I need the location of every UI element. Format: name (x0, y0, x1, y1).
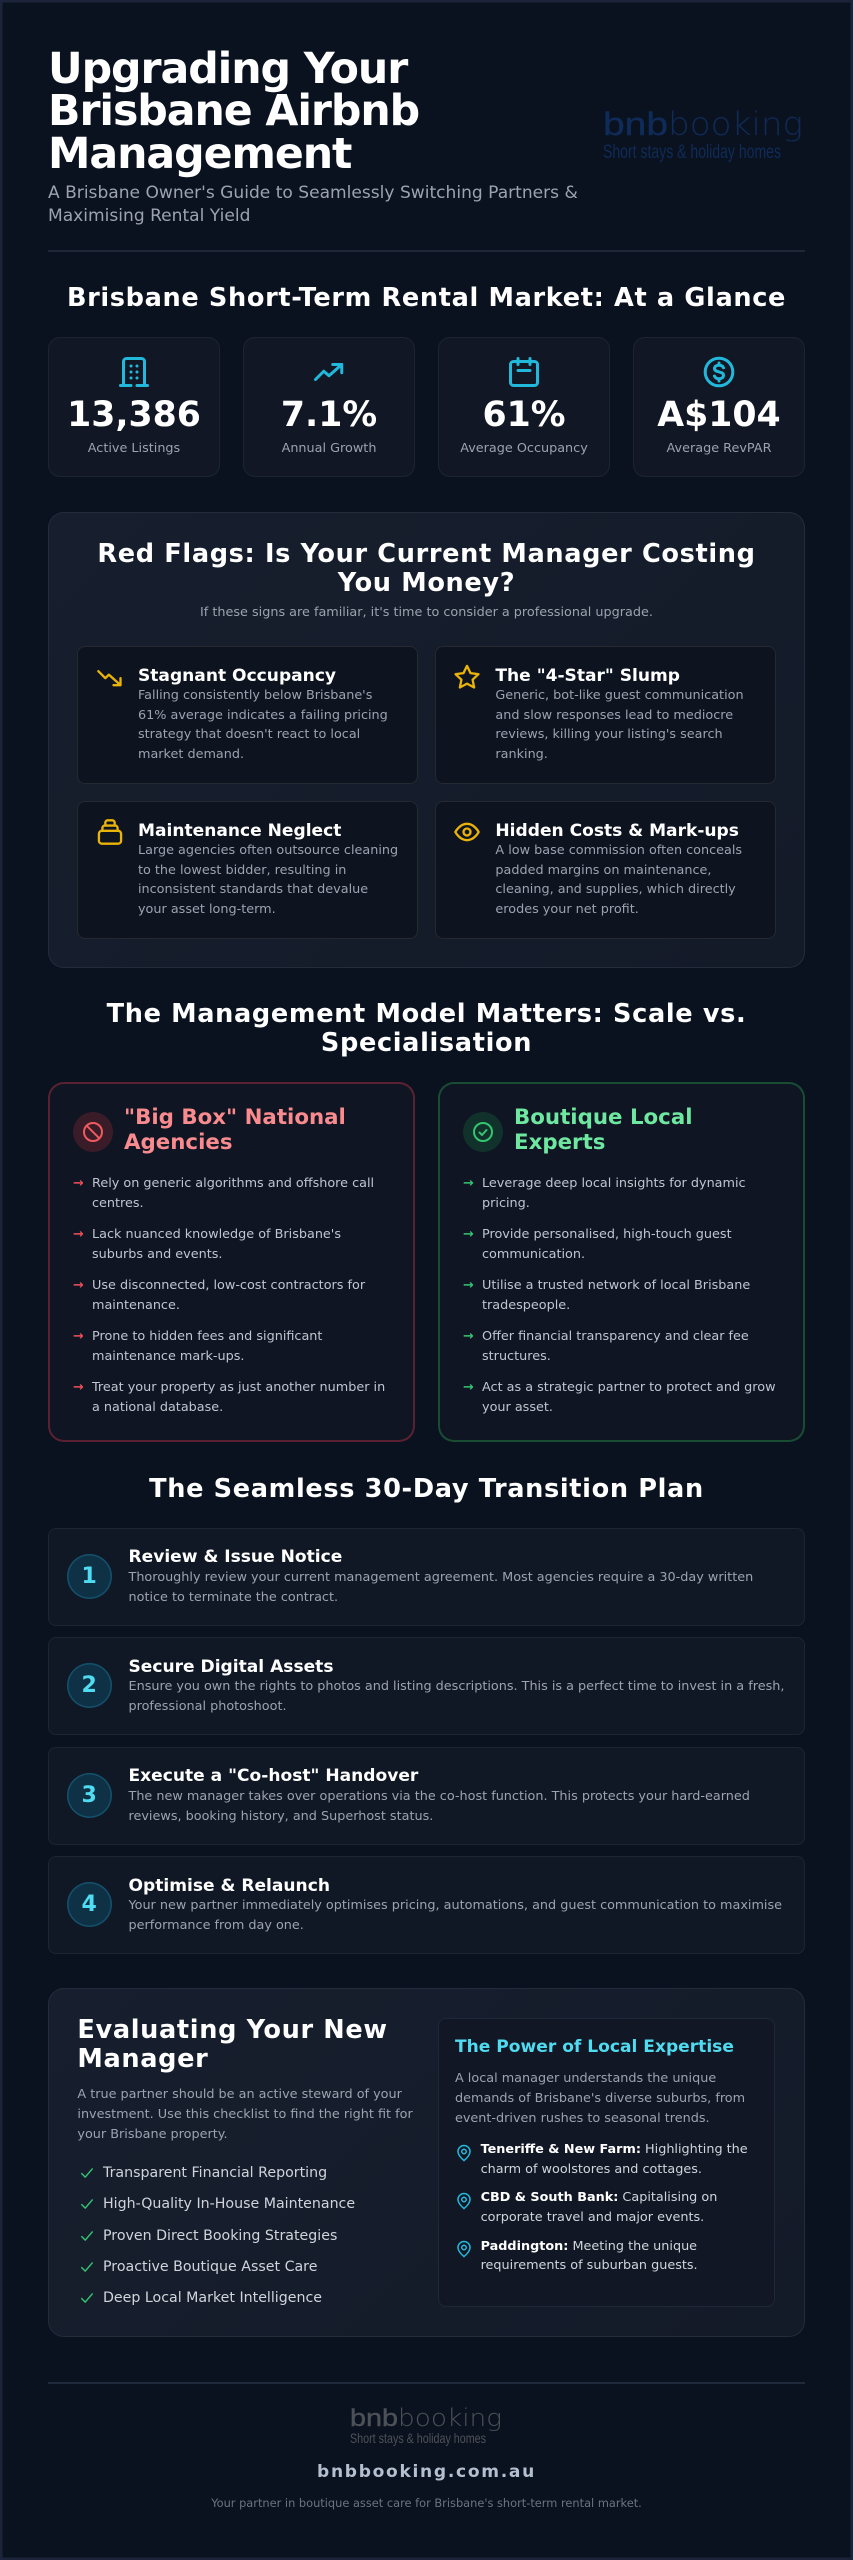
step 1: Review & Issue Notice (128, 1547, 342, 1567)
step 4 (48, 1856, 805, 1954)
heading: red flags: You Money? (338, 568, 515, 598)
step 3: The new manager takes over operations via the co-host function. This protects your hard-earned (128, 1789, 750, 1804)
list: big box drawbacks: Prone to hidden fees and significant (92, 1329, 322, 1344)
evaluating intro: A true partner should be an active steward of your (77, 2087, 402, 2102)
subtitle: A Brisbane Owner's Guide to Seamlessly Switching Partners & (48, 183, 578, 203)
local expertise heading: The Power of Local Expertise (455, 2037, 734, 2057)
stat: average occupancy (438, 337, 610, 477)
suburb: teneriffe: Teneriffe & New Farm: Highlighting the (481, 2142, 748, 2157)
panel: evaluating your new manager (48, 1988, 805, 2336)
card: stagnant occupancy: strategy that doesn't react to local (138, 727, 360, 742)
heading: boutique (514, 1105, 693, 1155)
card: power of local expertise (438, 2018, 775, 2307)
panel: boutique local experts (438, 1082, 805, 1442)
card: hidden costs: A low base commission often conceals (495, 843, 742, 858)
list: big box drawbacks: centres. (92, 1196, 144, 1210)
heading: management model: Specialisation (321, 1028, 532, 1058)
list: big box drawbacks (73, 1176, 385, 1415)
heading: big box: "Big Box" National (124, 1105, 346, 1130)
card: maintenance neglect: to the lowest bidder, resulting in (138, 862, 346, 878)
list: boutique benefits: Offer financial transparency and clear fee (482, 1329, 749, 1344)
suburb: teneriffe: charm of woolstores and cottages. (481, 2162, 702, 2177)
title: Upgrading Your (48, 44, 407, 94)
stat: average occupancy: 61% (482, 395, 566, 435)
card: maintenance neglect: your asset long-term. (138, 902, 276, 917)
list: big box drawbacks: → (73, 1176, 84, 1191)
stat: active listings: 13,386 (67, 395, 201, 435)
list: boutique benefits: → (463, 1278, 474, 1293)
heading: evaluating (77, 2015, 388, 2074)
suburb: paddington: Paddington: Meeting the unique (481, 2238, 697, 2254)
logo: bnbbooking header: booking (668, 106, 803, 143)
panel: red flags (48, 512, 805, 968)
icon: prohibited (73, 1112, 113, 1152)
logo: bnbbooking footer (350, 2404, 502, 2446)
title: Management (48, 129, 351, 179)
card: maintenance neglect: Large agencies often outsource cleaning (138, 843, 398, 858)
stat: average occupancy: Average Occupancy (460, 440, 588, 456)
step 3 (48, 1747, 805, 1845)
list: big box drawbacks: → (73, 1227, 84, 1242)
list: boutique benefits: structures. (482, 1349, 551, 1364)
title (48, 44, 419, 179)
local expertise text: event-driven rushes to seasonal trends. (455, 2111, 710, 2126)
local expertise text (455, 2071, 745, 2126)
card: stagnant occupancy: Falling consistently below Brisbane's (138, 688, 372, 703)
title: Brisbane Airbnb (48, 86, 419, 136)
card: stagnant occupancy (77, 646, 418, 784)
stat: average revpar: A$104 (657, 395, 781, 435)
list: boutique benefits: communication. (482, 1247, 585, 1262)
suburb: paddington: requirements of suburban guests. (481, 2258, 698, 2273)
suburb: paddington (457, 2238, 698, 2273)
icon: check circle (463, 1112, 503, 1152)
step 4: performance from day one. (128, 1918, 304, 1933)
list: big box drawbacks: → (73, 1380, 84, 1395)
step 2: professional photoshoot. (128, 1699, 287, 1714)
card: 4-star slump (435, 646, 776, 784)
step 4: Optimise & Relaunch (128, 1876, 330, 1896)
heading: big box (124, 1105, 346, 1155)
list: boutique benefits: Provide personalised, high-touch guest (482, 1227, 732, 1242)
step 1: Thoroughly review your current management agreement. Most agencies require a 30-day written (128, 1570, 753, 1585)
evaluating intro: investment. Use this checklist to find the right fit for (77, 2107, 413, 2122)
heading: boutique: Boutique Local (514, 1105, 693, 1130)
logo: bnbbooking footer: booking (398, 2404, 502, 2432)
heading: transition plan: The Seamless 30-Day Transition Plan (149, 1474, 704, 1504)
evaluating intro (77, 2087, 413, 2142)
card: hidden costs: erodes your net profit. (495, 902, 639, 917)
step 2: Secure Digital Assets (128, 1657, 333, 1677)
card: stagnant occupancy: 61% average indicates a failing pricing (138, 708, 388, 722)
list: big box drawbacks: → (73, 1329, 84, 1344)
step 3: reviews, booking history, and Superhost status. (128, 1809, 433, 1824)
suburb: cbd: corporate travel and major events. (481, 2210, 704, 2225)
red flags intro: If these signs are familiar, it's time to consider a professional upgrade. (200, 605, 653, 620)
list: big box drawbacks: a national database. (92, 1400, 223, 1415)
list: boutique benefits: → (463, 1329, 474, 1344)
step 2: 2 (82, 1673, 97, 1698)
subtitle (48, 183, 578, 226)
list: boutique benefits: tradespeople. (482, 1298, 570, 1313)
list: boutique benefits: → (463, 1227, 474, 1242)
stat: annual growth: Annual Growth (282, 440, 376, 456)
logo: bnbbooking footer: bnb (350, 2405, 398, 2432)
checklist: High-Quality In-House Maintenance (103, 2196, 355, 2212)
list: boutique benefits (463, 1176, 776, 1415)
list: big box drawbacks: maintenance. (92, 1298, 180, 1313)
list: boutique benefits: your asset. (482, 1400, 553, 1415)
card: 4-star slump: reviews, killing your listing's search (495, 727, 723, 742)
heading: red flags: Red Flags: Is Your Current Manager Costing (97, 539, 756, 569)
local expertise text: demands of Brisbane's diverse suburbs, from (455, 2091, 745, 2106)
card: stagnant occupancy: market demand. (138, 747, 244, 762)
checklist: Deep Local Market Intelligence (103, 2290, 322, 2306)
card: hidden costs: cleaning, and supplies, which directly (495, 882, 736, 897)
step 4: Your new partner immediately optimises pricing, automations, and guest communication to maximise (128, 1898, 782, 1913)
card: maintenance neglect: inconsistent standards that devalue (138, 882, 368, 897)
stat: average revpar (633, 337, 805, 477)
checklist: Proven Direct Booking Strategies (103, 2228, 337, 2244)
stat: active listings (48, 337, 220, 477)
list: boutique benefits: → (463, 1380, 474, 1395)
step 2: Ensure you own the rights to photos and listing descriptions. This is a perfect time to invest in a fresh, (128, 1679, 784, 1694)
list: boutique benefits: pricing. (482, 1196, 530, 1210)
list: big box drawbacks: Rely on generic algorithms and offshore call (92, 1176, 374, 1191)
logo: bnbbooking header: bnb (603, 106, 668, 142)
card: maintenance neglect: Maintenance Neglect (138, 821, 341, 841)
step 1: notice to terminate the contract. (128, 1590, 338, 1605)
card: hidden costs: padded margins on maintenance, (495, 862, 711, 878)
logo: bnbbooking header (603, 106, 803, 163)
list: big box drawbacks: → (73, 1278, 84, 1293)
list: boutique benefits: Utilise a trusted network of local Brisbane (482, 1278, 750, 1293)
step 3: 3 (82, 1783, 97, 1808)
list: big box drawbacks: Treat your property as just another number in (92, 1380, 385, 1395)
card: 4-star slump: ranking. (495, 747, 548, 762)
step 2 (48, 1637, 805, 1735)
card: stagnant occupancy: Stagnant Occupancy (138, 666, 336, 686)
step 1 (48, 1528, 805, 1626)
heading: evaluating: Manager (77, 2044, 208, 2074)
heading: management model: The Management Model Matters: Scale vs. (107, 999, 746, 1029)
heading: evaluating: Evaluating Your New (77, 2015, 388, 2045)
card: 4-star slump: and slow responses lead to mediocre (495, 708, 733, 722)
list: big box drawbacks: Use disconnected, low-cost contractors for (92, 1278, 365, 1293)
list: boutique benefits: Act as a strategic partner to protect and grow (482, 1380, 776, 1395)
list: big box drawbacks: Lack nuanced knowledge of Brisbane's (92, 1227, 341, 1242)
panel: big box agencies (48, 1082, 415, 1442)
suburb: cbd (457, 2190, 717, 2225)
footer url: bnbbooking.com.au (317, 2462, 536, 2482)
step 4: 4 (82, 1892, 97, 1917)
card: 4-star slump: Generic, bot-like guest communication (495, 688, 744, 703)
card: maintenance neglect (77, 801, 418, 939)
card: hidden costs (435, 801, 776, 939)
checklist (81, 2165, 355, 2306)
stat: annual growth: 7.1% (281, 395, 377, 435)
step 3: Execute a "Co-host" Handover (128, 1766, 418, 1786)
heading: red flags (97, 539, 756, 598)
list: boutique benefits: Leverage deep local insights for dynamic (482, 1176, 746, 1191)
local expertise text: A local manager understands the unique (455, 2071, 716, 2086)
subtitle: Maximising Rental Yield (48, 206, 250, 226)
checklist: Proactive Boutique Asset Care (103, 2259, 317, 2275)
stat: annual growth (243, 337, 415, 477)
list: boutique benefits: → (463, 1176, 474, 1191)
card: hidden costs: Hidden Costs & Mark-ups (495, 821, 739, 841)
heading: market at a glance: Brisbane Short-Term Rental Market: At a Glance (67, 283, 786, 313)
list: big box drawbacks: maintenance mark-ups. (92, 1349, 244, 1364)
heading: management model (106, 999, 746, 1058)
evaluating intro: your Brisbane property. (77, 2127, 228, 2142)
suburb: teneriffe (457, 2142, 748, 2177)
heading: boutique: Experts (514, 1130, 605, 1155)
checklist: Transparent Financial Reporting (103, 2165, 327, 2181)
heading: big box: Agencies (124, 1130, 233, 1155)
suburb: cbd: CBD & South Bank: Capitalising on (481, 2190, 717, 2205)
stat: average revpar: Average RevPAR (667, 440, 771, 456)
card: 4-star slump: The "4-Star" Slump (495, 666, 680, 686)
stat: active listings: Active Listings (88, 440, 180, 456)
list: big box drawbacks: suburbs and events. (92, 1247, 222, 1262)
step 1: 1 (82, 1564, 97, 1589)
footer tagline: Your partner in boutique asset care for Brisbane's short-term rental market. (211, 2496, 642, 2510)
